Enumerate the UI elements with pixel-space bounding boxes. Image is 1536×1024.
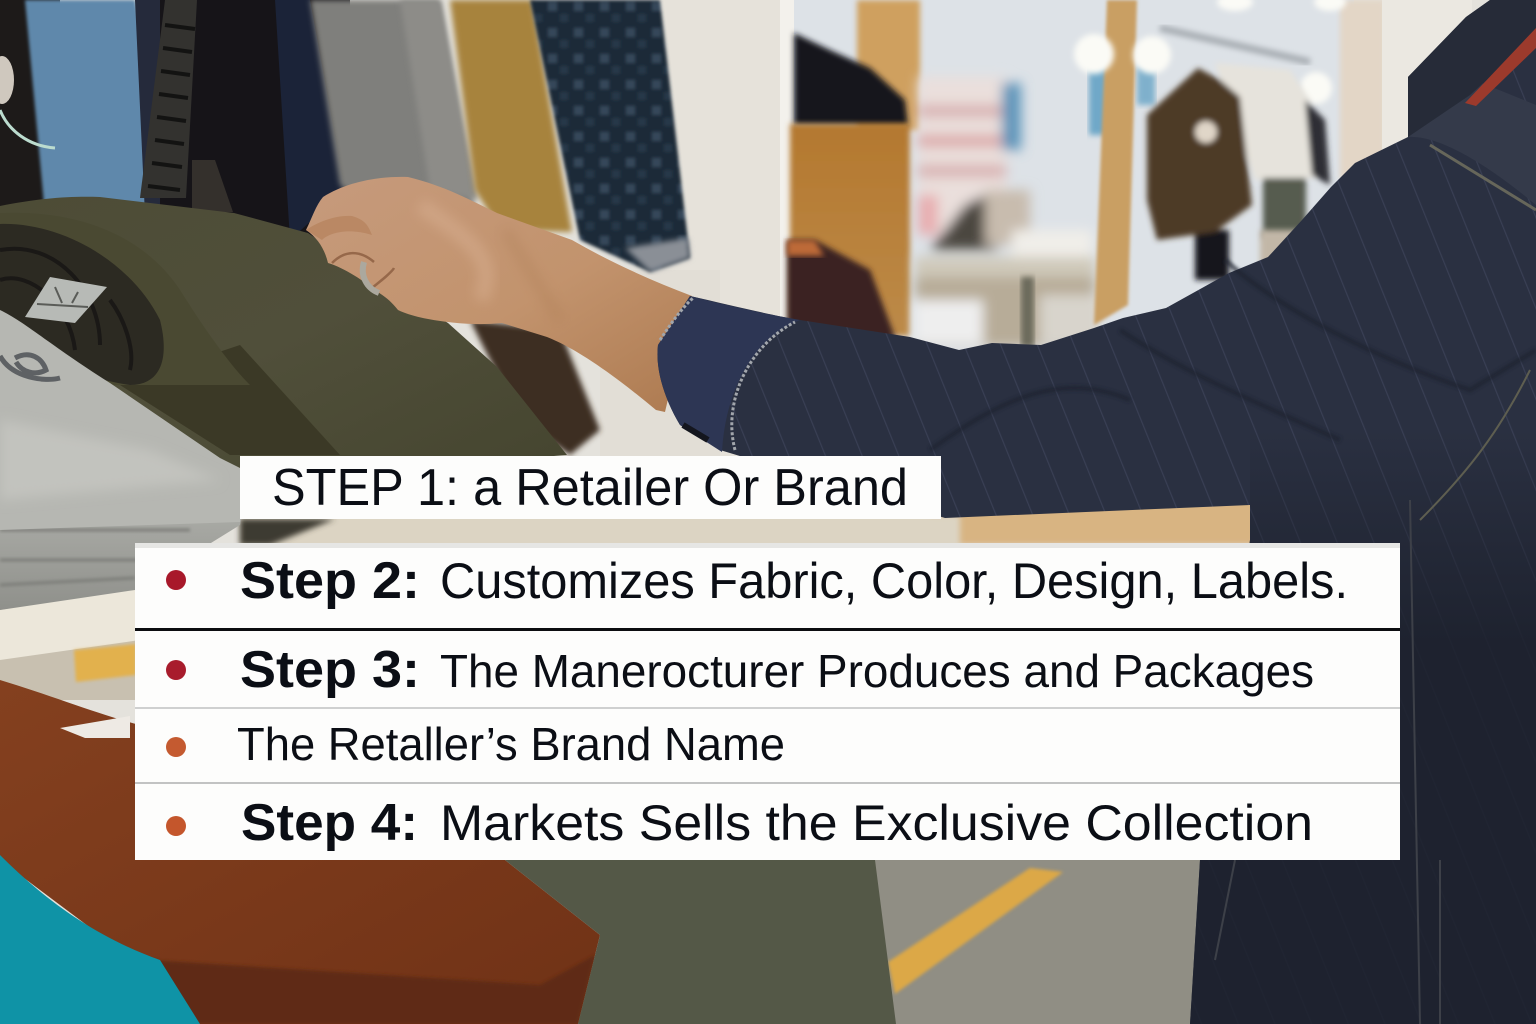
background store fixtures [787,0,1346,347]
step 3 row: The Manerocturer Produces and Packages [440,645,1314,697]
brand name row: The Retaller’s Brand Name [237,718,785,770]
garment tag [25,277,107,323]
step 4 row: Markets Sells the Exclusive Collection [440,795,1313,851]
step 2 row: Step 2: [240,552,420,610]
dark garment behind the arm [470,320,600,455]
olive folded garment [0,197,567,480]
step 1 heading box: STEP 1: a Retailer Or Brand [272,459,908,517]
shelf and floor at left edge [0,580,140,700]
rust folded garment [0,680,600,1024]
olive skirt [505,860,896,1024]
hanging brown sweater [1147,63,1330,280]
teal folded garment [0,855,200,1024]
grey folded sweaters [0,470,250,610]
ring [363,262,379,293]
step 3 row [166,641,1314,699]
mannequin hook [0,56,55,148]
steps panel [135,543,1400,860]
denim jacket arm and torso [657,0,1536,1024]
wood pillar [1094,0,1137,325]
grey sweater with logo [0,310,240,530]
step 2 row: Customizes Fabric, Color, Design, Labels. [440,553,1348,609]
red lanyard strap [1465,28,1536,106]
step 3 row: Step 3: [240,641,420,699]
hand and forearm [306,177,692,412]
shirt cuff [657,296,800,452]
hanging garments [0,0,690,272]
floor and yellow stripe [870,855,1210,1024]
step 4 row: Step 4: [241,794,418,852]
